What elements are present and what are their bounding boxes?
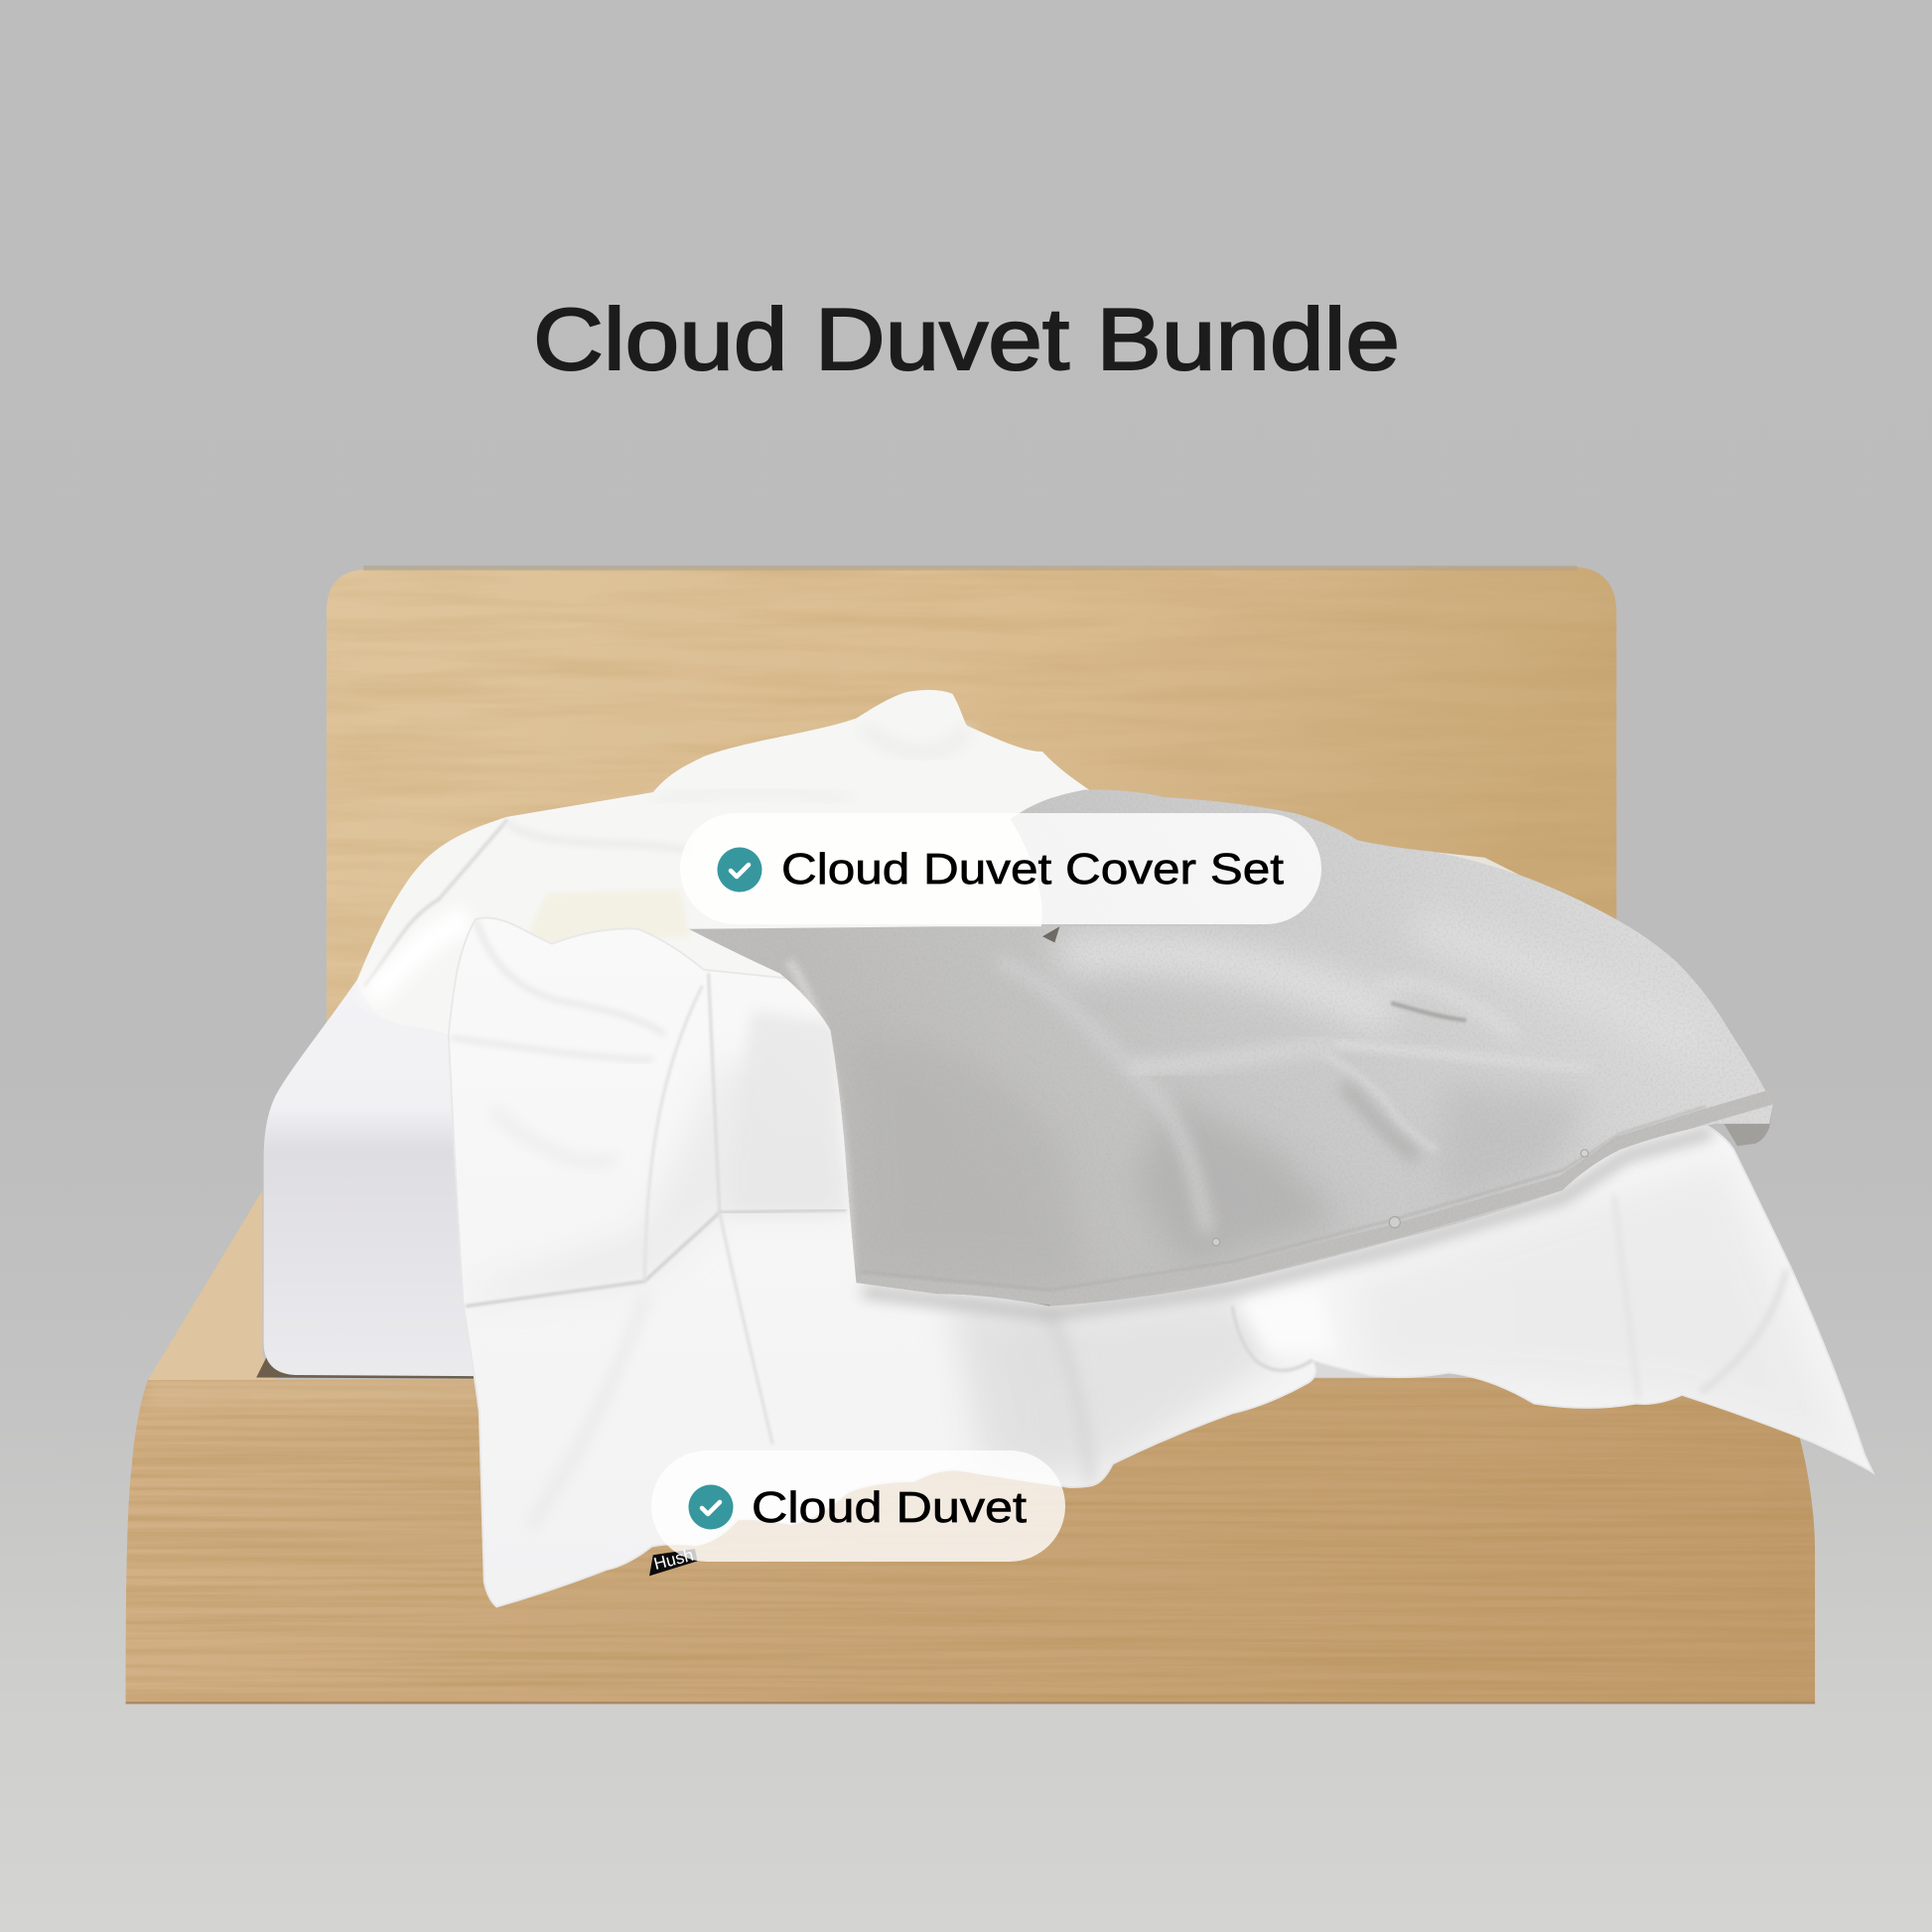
- title: Cloud Duvet Bundle: [533, 290, 1400, 388]
- grey duvet cover: [684, 788, 1780, 1312]
- label: Cloud Duvet: [651, 1450, 1065, 1562]
- duvet care tag: Hush: [651, 1545, 696, 1574]
- cover hem flap: [1719, 1104, 1773, 1146]
- cover fold shading: [1011, 1141, 1026, 1162]
- label: Cloud Duvet Cover Set: [680, 813, 1321, 924]
- quilt seams: [709, 973, 720, 1212]
- icon: check badge: [689, 1485, 733, 1529]
- label text: Cloud Duvet Cover Set: [781, 845, 1284, 894]
- icon: check badge: [717, 848, 762, 892]
- mattress: [264, 980, 492, 1376]
- mattress far side sliver: [1307, 1355, 1380, 1378]
- cover buttons: [1389, 1217, 1400, 1228]
- hem shadow under cover: [863, 1131, 1713, 1313]
- bed base side panel: [148, 1190, 277, 1380]
- label text: Cloud Duvet: [752, 1483, 1027, 1532]
- bed illustration: [123, 566, 1872, 1706]
- cream inner shadow: [527, 890, 690, 946]
- headboard: [327, 566, 1616, 1047]
- footboard: [123, 1375, 1818, 1706]
- white duvet cover, back fold: [357, 690, 1232, 1035]
- lace mattress edge: [1430, 852, 1534, 883]
- gap beneath mattress: [256, 1353, 492, 1379]
- quilt panel shading: [588, 1074, 738, 1272]
- white cloud duvet: [449, 917, 1872, 1606]
